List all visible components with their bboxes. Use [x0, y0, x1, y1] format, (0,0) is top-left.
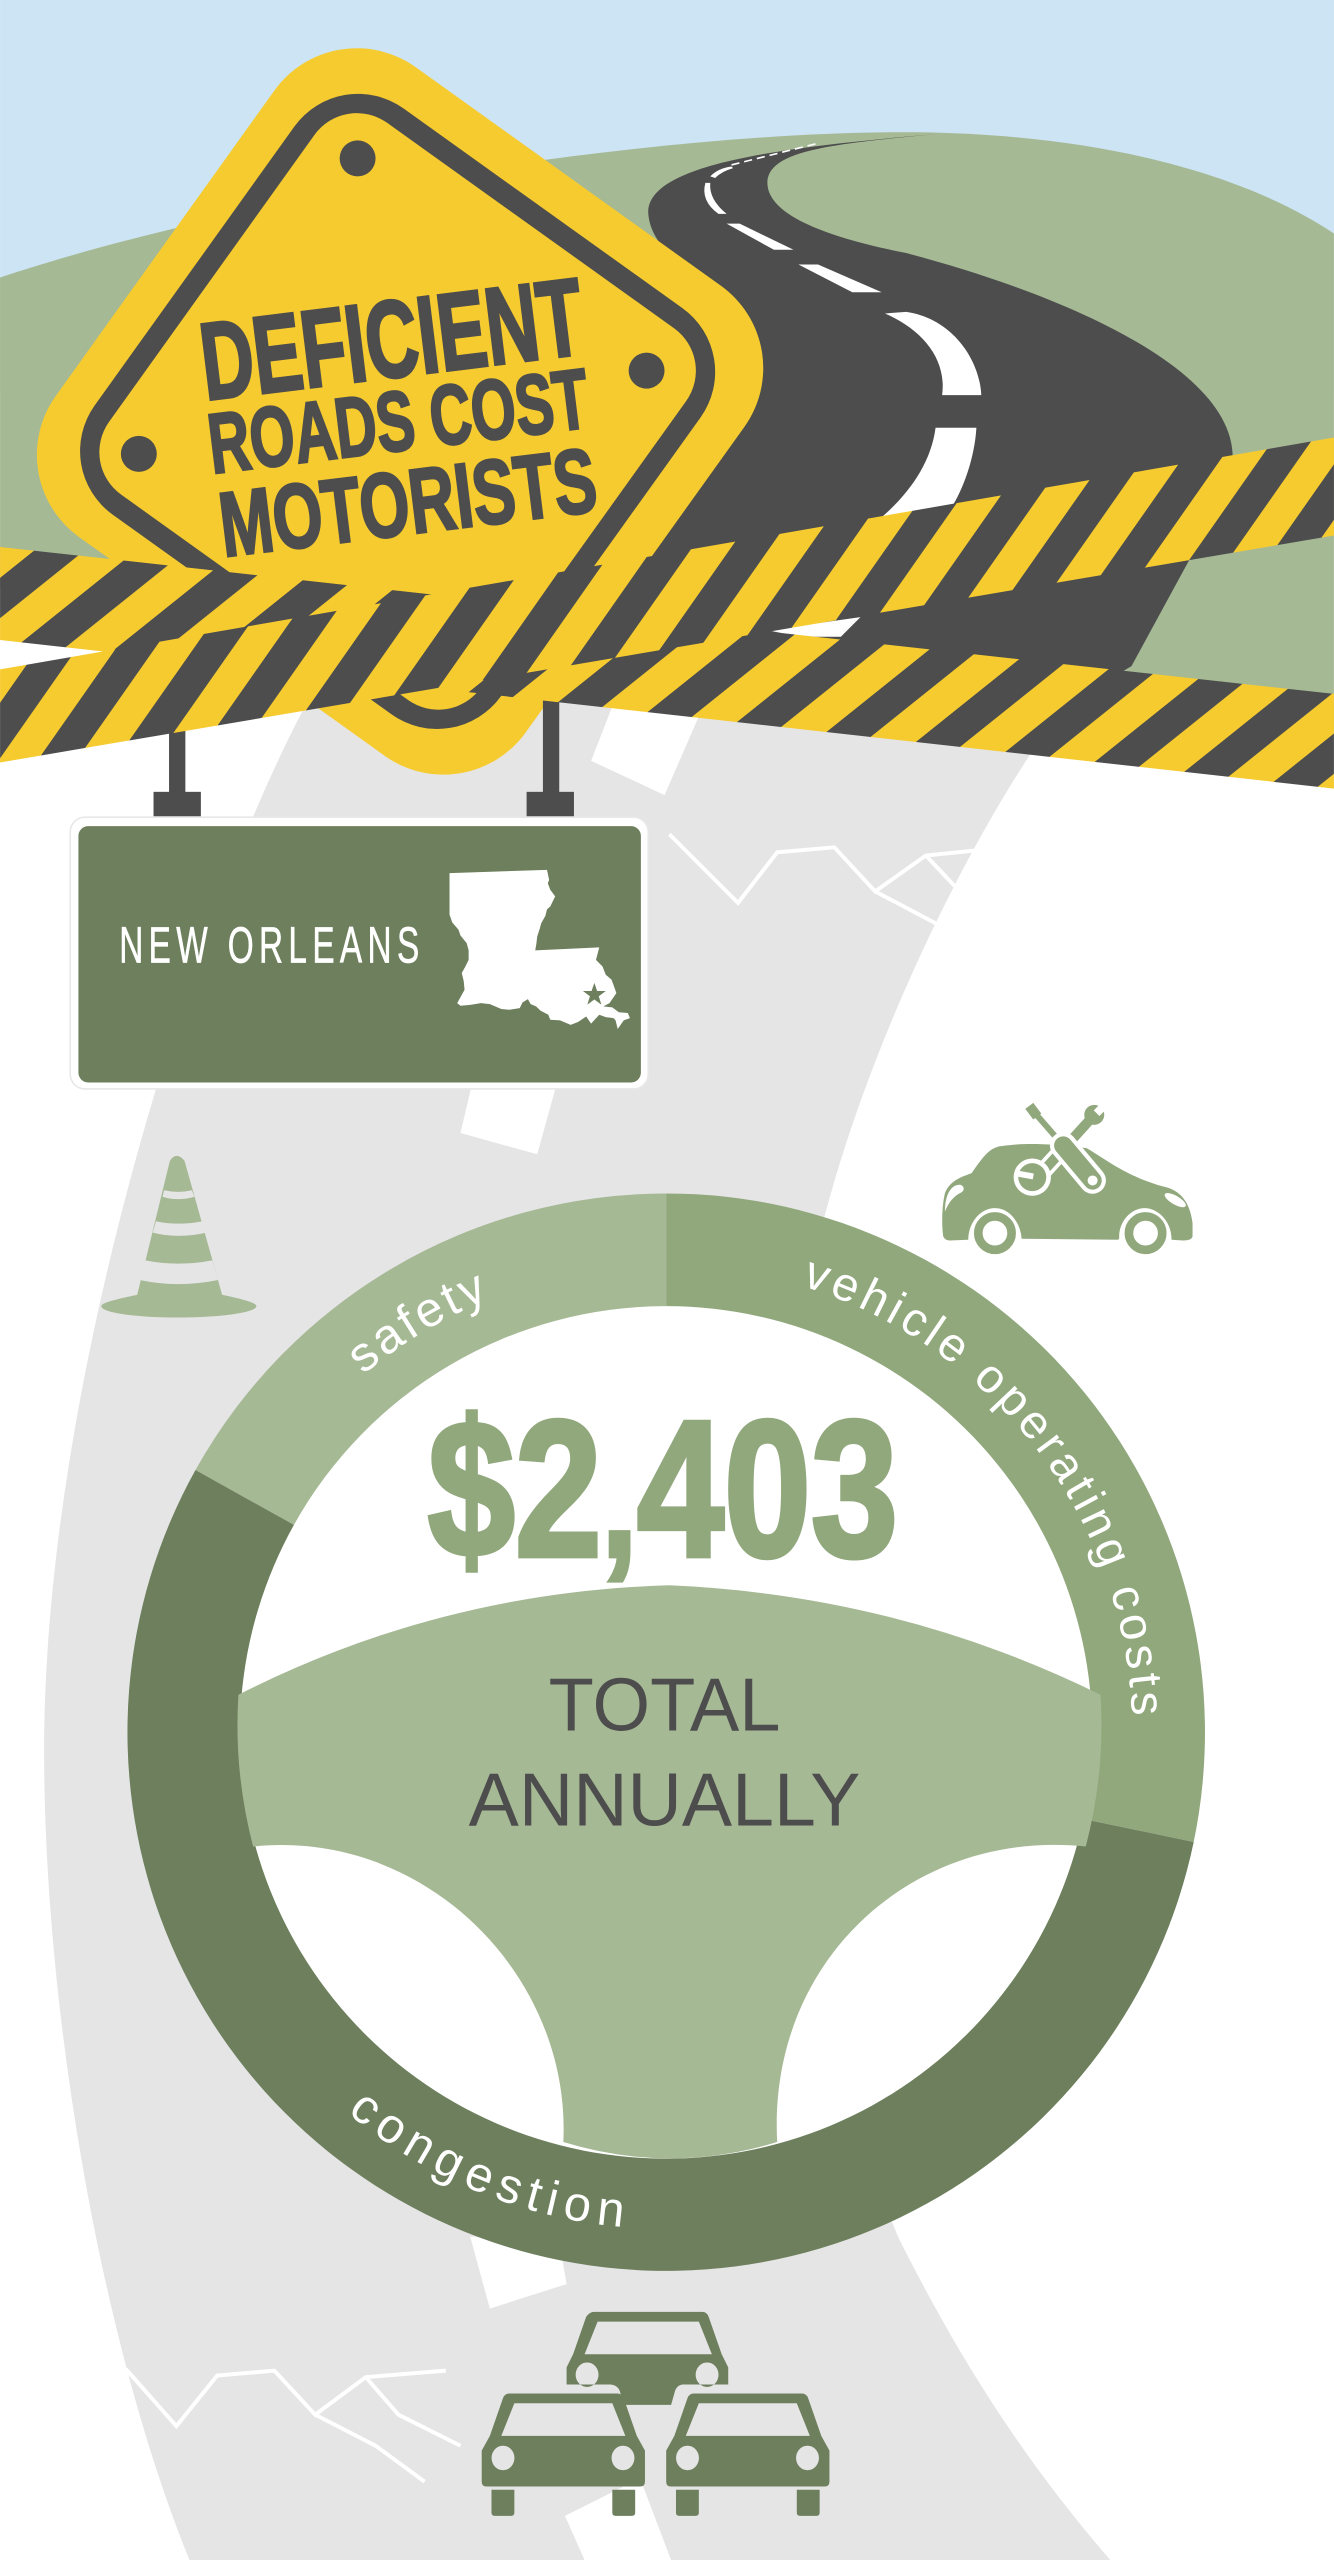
icon: traffic cone	[101, 1156, 256, 1318]
winding asphalt road	[490, 134, 1233, 718]
front left car	[482, 2393, 645, 2516]
label: safety: safety	[352, 1275, 480, 1371]
caution tape descending	[0, 547, 1334, 789]
label: vehicle operating costs: vehicle operating costs	[810, 1262, 1160, 1714]
sign posts	[154, 694, 574, 816]
city name: NEW ORLEANS	[119, 916, 425, 973]
sign plate	[0, 8, 803, 815]
icon: Louisiana map	[450, 870, 630, 1029]
segment: vehicle operating costs	[666, 1193, 1205, 1842]
segment: safety	[195, 1193, 666, 1525]
icon: traffic cars	[482, 2312, 829, 2516]
label: congestion: congestion	[352, 2098, 622, 2227]
sign inner border	[49, 63, 746, 760]
icon: car with tools	[942, 1101, 1193, 1250]
segment: congestion	[127, 1470, 1194, 2271]
sign bolts	[121, 140, 665, 472]
hills	[0, 132, 1334, 735]
back car	[567, 2312, 728, 2405]
warning sign	[0, 8, 803, 815]
sky	[0, 0, 1334, 392]
road cracks bottom	[126, 2369, 460, 2482]
front right car	[666, 2393, 829, 2516]
total caption: TOTAL	[549, 1663, 780, 1747]
sign title: DEFICIENT	[194, 256, 590, 424]
steering wheel chart	[127, 1194, 1205, 2271]
wheel hub	[237, 1585, 1101, 2158]
total caption: ANNUALLY	[469, 1757, 860, 1841]
sign title: MOTORISTS	[214, 429, 602, 577]
location board	[70, 817, 648, 1089]
caution tape ascending	[0, 438, 1334, 762]
road cracks top	[669, 834, 975, 924]
sign title	[194, 256, 602, 577]
wheel centre	[238, 1304, 1094, 2160]
sign title: ROADS COST	[203, 350, 594, 491]
background road	[44, 694, 1110, 2560]
total amount: $2,403	[428, 1381, 898, 1598]
total caption	[469, 1663, 860, 1841]
